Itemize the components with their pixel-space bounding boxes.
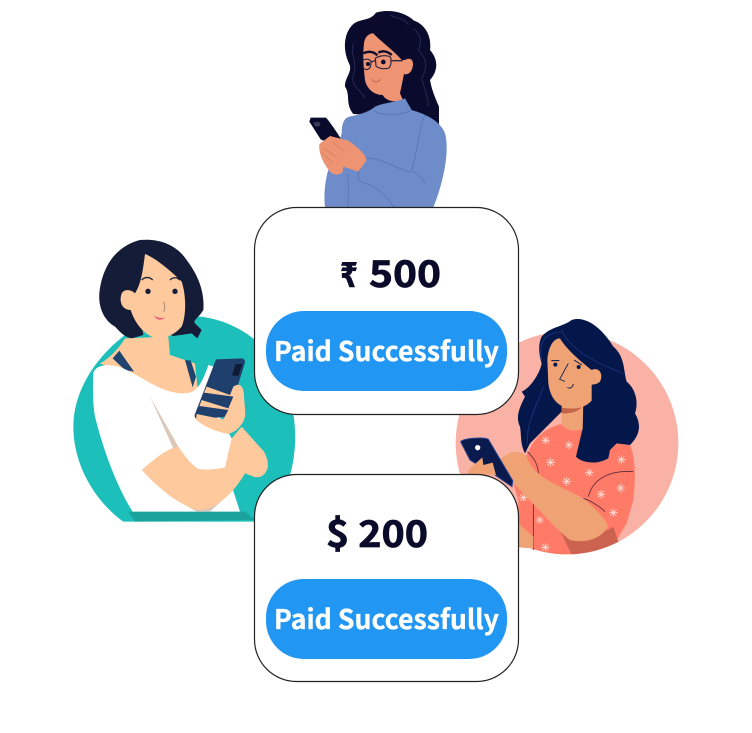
- fingers: [196, 385, 245, 434]
- arm shadow: [560, 526, 618, 554]
- illustration: woman with long hair on pink circle: [456, 319, 678, 556]
- phone: [309, 118, 342, 143]
- hair: [518, 319, 639, 463]
- neck shadow: [562, 403, 584, 413]
- amount: 500: [369, 244, 441, 298]
- button: [266, 579, 507, 659]
- rupee symbol: ₹: [340, 248, 358, 297]
- button label: Paid Successfully: [274, 330, 499, 369]
- arm: [142, 427, 268, 510]
- illustration: woman with short hair on teal blob: [73, 240, 295, 522]
- bra straps: [113, 351, 196, 387]
- white shirt: [93, 365, 240, 512]
- phone lens: [313, 122, 321, 127]
- phone: [195, 358, 245, 419]
- facial features: [551, 360, 582, 388]
- hair strands: [353, 15, 428, 107]
- teal blob: [73, 316, 295, 522]
- face: [547, 338, 601, 409]
- illustration: woman with glasses and blue sweater: [309, 11, 447, 207]
- hair highlight lines: [527, 330, 623, 443]
- card background: [254, 208, 518, 414]
- hair: [99, 240, 204, 338]
- face: [363, 33, 413, 101]
- sleeve outline: [527, 452, 633, 550]
- shirt stars: [519, 436, 626, 551]
- holding hand: [468, 457, 496, 475]
- button label: Paid Successfully: [274, 598, 499, 637]
- arm: [500, 452, 608, 541]
- card: 200 dollars: [254, 474, 518, 682]
- sweater: [324, 98, 447, 207]
- hands: [319, 136, 367, 175]
- amount: $ 200: [326, 504, 428, 558]
- facial features: [142, 277, 180, 320]
- pink circle: [456, 332, 678, 554]
- face: [121, 254, 185, 338]
- lower arm: [518, 523, 533, 548]
- phone camera: [475, 445, 480, 450]
- button: [266, 311, 507, 391]
- shirt shadow: [150, 397, 233, 512]
- neck and chest: [100, 337, 198, 395]
- card: 500 rupees: [254, 208, 518, 414]
- phone: [461, 438, 513, 487]
- card background: [254, 474, 518, 682]
- sweater folds: [347, 110, 425, 207]
- infographic canvas: [73, 11, 678, 682]
- neck: [562, 402, 583, 431]
- shirt: [513, 424, 635, 555]
- glasses and eyes: [363, 51, 403, 82]
- ground shadow: [128, 512, 255, 522]
- phone camera: [232, 364, 242, 376]
- hair: [345, 11, 439, 128]
